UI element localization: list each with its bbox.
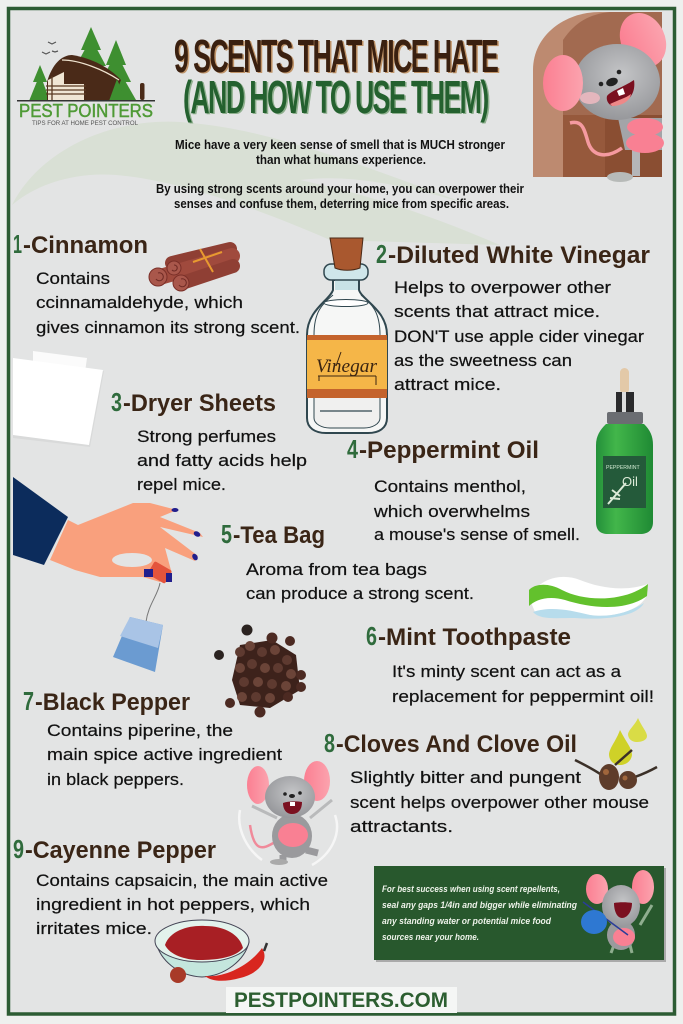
heading: 7 — [23, 686, 34, 716]
body: scents that attract mice. — [394, 303, 600, 321]
heading: 8 — [324, 728, 335, 758]
logo: Pest Pointers — [17, 27, 155, 127]
icon: black peppercorns — [214, 624, 306, 718]
intro text: By using strong scents around your home, you can overpower their — [156, 182, 524, 196]
body: which overwhelms — [373, 503, 530, 521]
body: can produce a strong scent. — [246, 585, 474, 603]
illustration: mouse with bindle — [581, 870, 654, 953]
scent 6: mint toothpaste — [366, 621, 654, 706]
body: gives cinnamon its strong scent. — [36, 319, 300, 337]
body: attractants. — [350, 818, 453, 836]
intro text: than what humans experience. — [256, 153, 426, 167]
icon: pine trees — [29, 27, 136, 101]
title: 9 SCENTS THAT MICE HATE — [176, 31, 500, 83]
icon: cabin — [46, 55, 126, 101]
heading: -Peppermint Oil — [359, 437, 539, 464]
heading: 1 — [13, 229, 22, 259]
body: repel mice. — [137, 476, 226, 494]
scent 9: cayenne pepper — [13, 834, 328, 983]
icon: person — [140, 83, 144, 100]
footer url: PESTPOINTERS.COM — [234, 989, 448, 1012]
body: and fatty acids help — [137, 452, 307, 470]
scent 2: diluted white vinegar — [376, 239, 650, 394]
title: 9 SCENTS THAT MICE HATE — [174, 30, 499, 82]
body: replacement for peppermint oil! — [392, 688, 654, 706]
intro text: senses and confuse them, deterring mice from specific areas. — [174, 197, 509, 211]
heading: -Cinnamon — [23, 232, 148, 259]
body: Strong perfumes — [137, 428, 276, 446]
body: It's minty scent can act as a — [392, 663, 622, 681]
body: ccinnamaldehyde, which — [36, 294, 243, 312]
icon: peppermint oil bottle — [596, 368, 653, 534]
body — [350, 769, 649, 836]
body: Helps to overpower other — [394, 279, 612, 297]
body: Contains capsaicin, the main active — [36, 872, 328, 890]
heading: -Cloves And Clove Oil — [336, 731, 577, 758]
heading: 6 — [366, 621, 377, 651]
heading: -Diluted White Vinegar — [388, 242, 650, 269]
icon: bowl of cayenne with chili — [155, 920, 267, 983]
bottle label: PEPPERMINT — [606, 465, 641, 471]
body: Aroma from tea bags — [246, 561, 427, 579]
heading: -Black Pepper — [35, 689, 190, 716]
title — [174, 30, 500, 124]
heading: 4 — [347, 434, 358, 464]
callout text — [382, 884, 577, 943]
intro text — [156, 138, 524, 211]
callout text: any standing water or potential mice food — [382, 916, 551, 927]
scent 4: peppermint oil — [347, 368, 653, 544]
body: attract mice. — [394, 376, 501, 394]
body — [373, 478, 580, 544]
body: in black peppers. — [47, 771, 184, 789]
illustration: mouse in doorway — [533, 5, 675, 182]
callout text: For best success when using scent repellents, — [382, 884, 560, 895]
title: (AND HOW TO USE THEM) — [183, 71, 489, 123]
body: irritates mice. — [36, 920, 152, 938]
body: as the sweetness can — [394, 352, 572, 370]
body: Slightly bitter and pungent — [350, 769, 581, 787]
scent 7: black pepper — [23, 686, 282, 789]
heading: -Cayenne Pepper — [25, 837, 216, 864]
body: Contains — [36, 270, 110, 288]
body: Contains piperine, the — [47, 722, 233, 740]
callout: best success tip — [374, 866, 666, 962]
body — [36, 872, 328, 938]
callout text: seal any gaps 1/4in and bigger while eliminating — [382, 900, 577, 911]
illustration: hand holding tea bag — [13, 477, 203, 672]
logo tagline: TIPS FOR AT HOME PEST CONTROL — [32, 120, 139, 127]
body — [36, 270, 300, 337]
heading: 5 — [221, 519, 232, 549]
scent 3: dryer sheets — [13, 351, 307, 494]
illustration: jumping mouse — [239, 761, 337, 865]
icon: toothpaste — [529, 577, 648, 619]
body: main spice active ingredient — [47, 746, 282, 764]
body: DON'T use apple cider vinegar — [394, 328, 645, 346]
scent 8: cloves and clove oil — [324, 718, 657, 836]
body: a mouse's sense of smell. — [374, 526, 580, 544]
body — [392, 663, 654, 706]
body: Contains menthol, — [374, 478, 526, 496]
body: scent helps overpower other mouse — [350, 794, 649, 812]
body — [394, 279, 645, 394]
icon: cloves and oil drops — [575, 718, 657, 790]
icon: birds — [42, 42, 58, 54]
heading: 3 — [111, 387, 122, 417]
title: (AND HOW TO USE THEM) — [184, 72, 491, 124]
logo wordmark: PEST POINTERS — [19, 101, 153, 121]
body — [47, 722, 282, 789]
callout text: sources near your home. — [382, 932, 479, 943]
icon: dryer sheets — [13, 351, 104, 447]
body: ingredient in hot peppers, which — [36, 896, 310, 914]
body — [246, 561, 474, 603]
icon: peppermint oil bottle: Oil — [622, 474, 638, 489]
bottle label: Vinegar — [316, 356, 378, 377]
intro text: Mice have a very keen sense of smell that is MUCH stronger — [175, 138, 505, 152]
scent 5: tea bag — [221, 519, 474, 603]
heading: -Dryer Sheets — [123, 390, 276, 417]
heading: 2 — [376, 239, 387, 269]
heading: 9 — [13, 834, 24, 864]
heading: -Mint Toothpaste — [378, 624, 571, 651]
heading: -Tea Bag — [233, 522, 325, 549]
scent 1: cinnamon — [13, 229, 300, 337]
icon: cinnamon sticks — [149, 249, 233, 291]
illustration: vinegar bottle — [307, 238, 387, 433]
icon: tea bag — [113, 617, 163, 672]
body — [137, 428, 307, 494]
